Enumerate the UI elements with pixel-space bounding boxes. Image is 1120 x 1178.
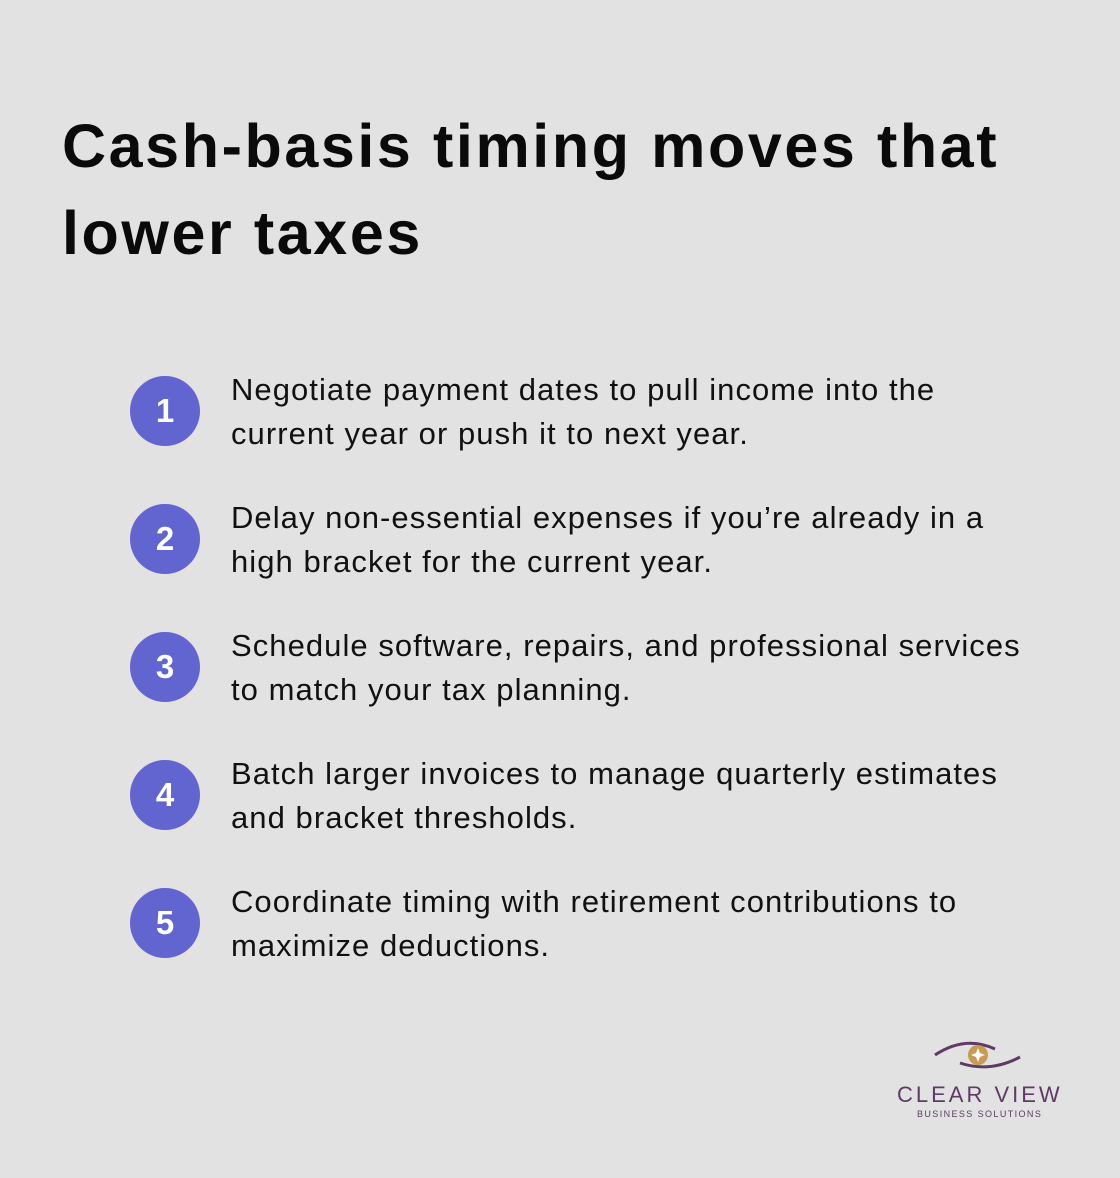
item 5: 5 <box>156 904 174 941</box>
item 1: current year or push it to next year. <box>231 416 749 451</box>
title: lower taxes <box>62 199 423 267</box>
item 4 <box>130 756 998 835</box>
item 5: Coordinate timing with retirement contributions to <box>231 884 957 919</box>
item 4: 4 <box>156 776 174 813</box>
item 3: Schedule software, repairs, and professional services <box>231 628 1021 663</box>
item 2: Delay non-essential expenses if you’re already in a <box>231 500 984 535</box>
title: Cash-basis timing moves that <box>62 112 999 180</box>
item 4: and bracket thresholds. <box>231 800 577 835</box>
item 2: 2 <box>156 520 174 557</box>
logo: CLEAR VIEW <box>897 1082 1063 1107</box>
logo <box>897 1042 1063 1119</box>
item 1: 1 <box>156 392 174 429</box>
logo: BUSINESS SOLUTIONS <box>917 1109 1042 1119</box>
item 3: to match your tax planning. <box>231 672 632 707</box>
item 2 <box>130 500 984 579</box>
item 5: maximize deductions. <box>231 928 550 963</box>
title <box>62 112 999 267</box>
item 4: Batch larger invoices to manage quarterly estimates <box>231 756 998 791</box>
item 1: Negotiate payment dates to pull income into the <box>231 372 935 407</box>
item 2: high bracket for the current year. <box>231 544 713 579</box>
item 5 <box>130 884 957 963</box>
item 1 <box>130 372 935 451</box>
item 3: 3 <box>156 648 174 685</box>
item 3 <box>130 628 1021 707</box>
